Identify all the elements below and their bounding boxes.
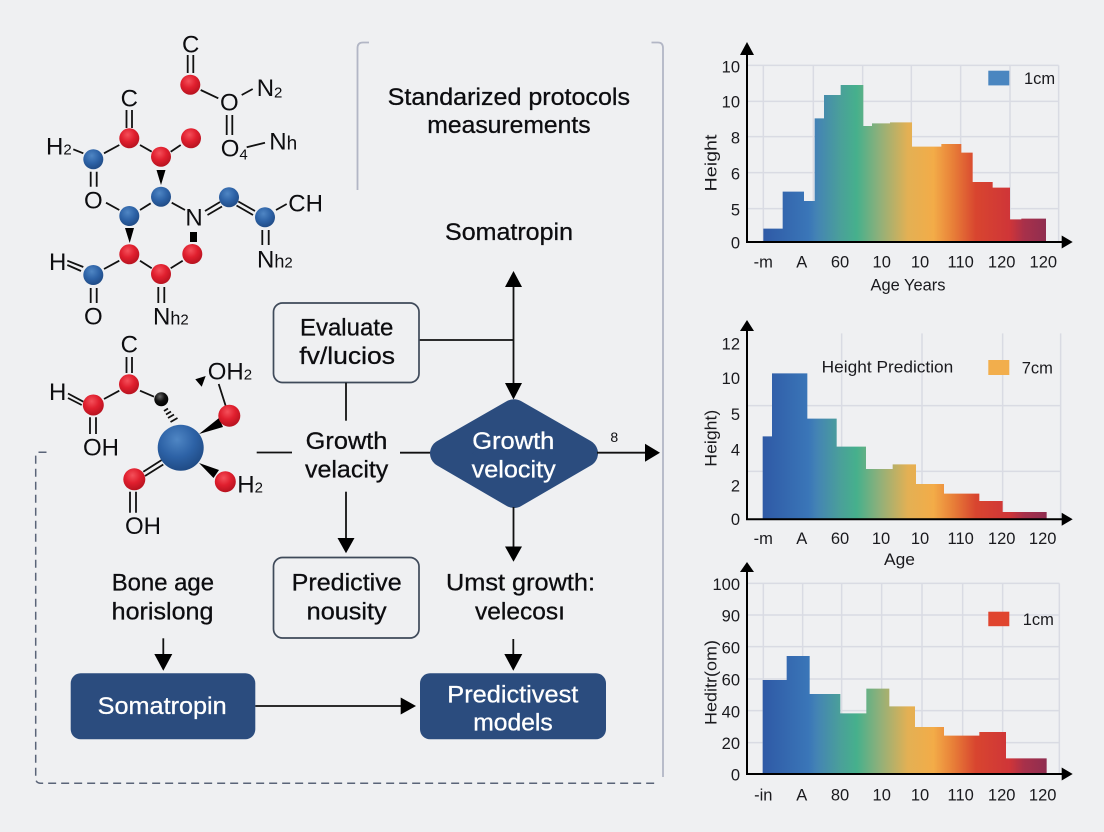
label: Umst growth velecosi: velecosı [475, 598, 565, 625]
axes [740, 42, 1073, 248]
y tick labels: 10 [722, 94, 740, 112]
connector: Growth velacity to diamond [400, 452, 432, 454]
atom labels: OH [83, 435, 119, 462]
atom labels: OH2 [208, 358, 252, 385]
atom labels: OH [125, 513, 161, 540]
y tick labels: 8 [731, 129, 740, 147]
axes [740, 320, 1073, 526]
axis titles: Age Years [870, 277, 946, 295]
axis titles: Height [703, 134, 721, 192]
y tick labels: 20 [722, 735, 740, 753]
x tick labels [754, 254, 1057, 272]
axis titles: Height) [703, 410, 721, 467]
y tick labels: 2 [731, 478, 740, 496]
x tick labels: A [796, 254, 807, 272]
x tick labels: 110 [948, 254, 974, 272]
arrow: vertical connector between Somatropin and diamond [505, 271, 522, 400]
x tick labels: 120 [988, 254, 1015, 272]
x tick labels: 10 [911, 254, 929, 272]
diamond: Growth velocity: velocity [472, 456, 556, 483]
axis titles: Age [884, 551, 915, 569]
atoms [83, 75, 275, 285]
y tick labels: 10 [722, 370, 740, 388]
box: Predictivest models: Predictivest [447, 682, 579, 709]
x tick labels: 80 [831, 787, 849, 805]
grid and bars [747, 583, 1059, 774]
y tick labels: 5 [731, 406, 740, 424]
box: Predictivest models: models [473, 710, 553, 737]
axis title: Heditr(om) [703, 640, 721, 725]
heading: standardized protocols [388, 84, 630, 139]
box: Predictive nousity: Predictive [292, 570, 402, 597]
arrow: Bone age to Somatropin [154, 638, 172, 671]
y tick labels: 10 [722, 59, 740, 77]
wedge bonds [125, 170, 197, 243]
y tick labels: 0 [731, 234, 740, 252]
axis titles [703, 410, 915, 569]
legend: 7cm [1022, 359, 1053, 377]
diamond: Growth velocity: Growth [472, 428, 554, 455]
arrow: Growth velacity to Predictive box [338, 492, 354, 553]
axis titles [703, 134, 946, 295]
atom labels: O [84, 187, 103, 214]
atom labels: Nh [269, 128, 297, 155]
atom labels: 2 [274, 85, 282, 102]
y tick labels [712, 576, 740, 785]
y tick labels: 5 [731, 202, 740, 220]
atom labels: C [121, 332, 138, 359]
atom labels: 4 [239, 147, 248, 164]
wedge bonds [195, 376, 223, 478]
y tick labels: 60 [722, 639, 740, 657]
atoms [83, 374, 240, 492]
legend [988, 611, 1054, 629]
x tick labels: 60 [831, 254, 849, 272]
axes [740, 562, 1073, 780]
atom labels: N [257, 75, 274, 102]
atom labels: H2 [46, 133, 72, 160]
y tick labels: 12 [722, 335, 740, 353]
x tick labels: -in [754, 787, 772, 805]
connector: Evaluate to vertical line [419, 339, 514, 341]
atom labels: O [84, 303, 103, 330]
y tick labels: 100 [712, 576, 740, 594]
arrow: Somatropin to Predictivest models [255, 698, 416, 714]
x tick labels [754, 787, 1056, 805]
y tick labels [722, 59, 740, 252]
x tick labels: 10 [873, 254, 891, 272]
x tick labels: 60 [831, 530, 849, 548]
x tick labels: 10 [872, 530, 890, 548]
arrow: Umst growth to Predictivest models [504, 639, 522, 671]
x tick labels: 120 [1030, 254, 1057, 272]
x tick labels: A [796, 787, 807, 805]
atom labels: Nh2 [257, 247, 293, 274]
chart: middle histogram, height prediction [703, 320, 1073, 569]
box: Predictive nousity: nousity [307, 598, 387, 625]
x tick labels: -m [754, 254, 773, 272]
x tick labels [754, 530, 1056, 548]
x tick labels: A [796, 530, 807, 548]
connector: molecule to Growth velacity [257, 452, 292, 454]
x tick labels: 110 [948, 530, 974, 548]
label: Growth velacity [305, 428, 388, 483]
chart: top histogram [703, 42, 1073, 295]
box: Predictive nousity [274, 558, 419, 638]
arrow: diamond to charts [597, 429, 660, 462]
bonds [68, 357, 226, 513]
label: Somatropin: Somatropin [445, 219, 573, 246]
molecule: upper structure [46, 31, 323, 330]
atom labels: C [121, 86, 138, 113]
x tick labels: 120 [1029, 530, 1056, 548]
atom labels [49, 332, 263, 540]
legend: 1cm [1023, 611, 1054, 629]
label: Bone age horislong [112, 570, 214, 625]
legend [988, 70, 1055, 88]
y tick labels: 0 [731, 767, 740, 785]
x tick labels: 120 [988, 787, 1015, 805]
y tick labels [722, 335, 740, 529]
box: Predictivest models [420, 673, 606, 739]
legend [988, 359, 1053, 377]
chart label: Height Prediction [822, 359, 953, 377]
heading: standardized protocols: Standarized protocols [388, 84, 630, 111]
diamond: Growth velocity [444, 413, 584, 494]
panel frame: solid top and right bracket [358, 42, 663, 777]
x tick labels: 10 [873, 787, 891, 805]
atom labels [46, 31, 323, 330]
label: Umst growth velecosi: Umst growth: [446, 570, 595, 597]
atom labels: H2 [237, 472, 263, 499]
atom labels: O [221, 136, 239, 163]
label: Growth velacity: velacity [305, 456, 388, 483]
y tick labels: 4 [731, 442, 740, 460]
y tick labels: 90 [722, 608, 740, 626]
y tick labels: 6 [731, 165, 740, 183]
arrow: diamond to Umst growth [505, 507, 522, 562]
molecule: lower structure [49, 332, 263, 540]
box: Somatropin [71, 673, 255, 739]
x tick labels: 110 [948, 787, 974, 805]
bonds [67, 55, 287, 303]
atom labels: H [49, 249, 66, 276]
label: Bone age horislong: Bone age [112, 570, 214, 597]
y tick labels: 0 [731, 511, 740, 529]
atom labels: H [49, 379, 66, 406]
chart: bottom histogram [703, 562, 1073, 805]
legend: 1cm [1024, 70, 1055, 88]
grid and bars [747, 333, 1061, 519]
x tick labels: 10 [911, 787, 929, 805]
box: Evaluate: Evaluate [300, 315, 393, 342]
x tick labels: 120 [1029, 787, 1056, 805]
label: Growth velacity: Growth [306, 428, 387, 455]
box: Somatropin: Somatropin [98, 693, 227, 720]
x tick labels: 10 [911, 530, 929, 548]
x tick labels: -m [754, 530, 773, 548]
box: Evaluate [274, 303, 419, 382]
y tick labels: 40 [722, 703, 740, 721]
heading: standardized protocols: measurements [427, 112, 591, 139]
atom labels: Nh2 [153, 303, 189, 330]
label: Bone age horislong: horislong [112, 598, 213, 625]
arrow: diamond to charts: 8 [610, 429, 618, 445]
atom labels: O [220, 90, 239, 117]
x tick labels: 120 [988, 530, 1015, 548]
grid and bars [747, 65, 1059, 242]
y tick labels: 60 [722, 672, 740, 690]
atom labels: C [182, 31, 199, 58]
atom labels: N [185, 205, 203, 232]
box: Evaluate: fv/lucios [299, 343, 395, 370]
panel frame: dashed left and bottom border [36, 452, 658, 783]
connector: Evaluate down to Growth velacity [345, 383, 347, 421]
label: Umst growth velecosi [446, 570, 595, 625]
atom labels: CH [288, 191, 323, 218]
